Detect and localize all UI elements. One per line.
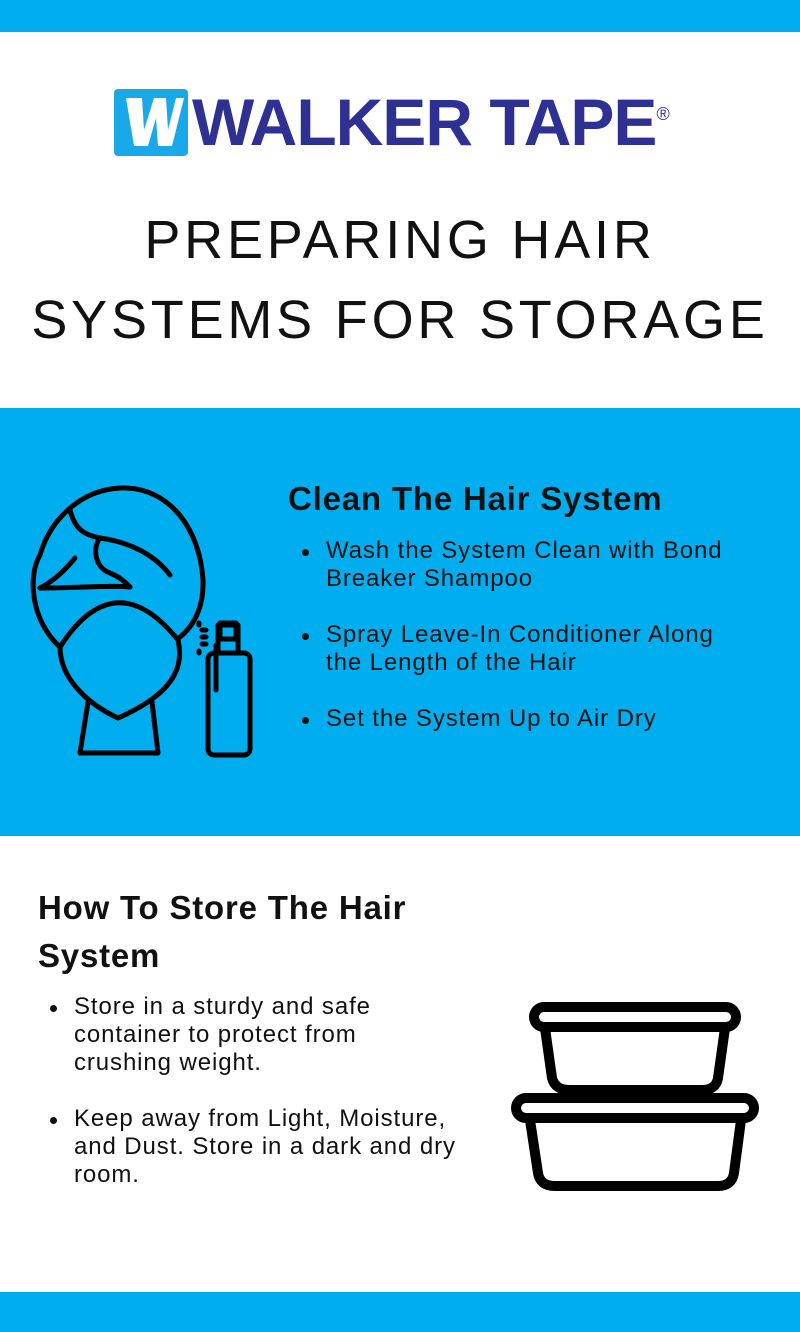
bullets: store (50, 993, 456, 1188)
bullets: store: Keep away from Light, Moisture, and Dust. Store in a dark and dry room. (74, 1105, 456, 1188)
panel: clean (0, 408, 800, 836)
title: SYSTEMS FOR STORAGE (31, 290, 769, 350)
heading: store: How To Store The Hair System (38, 889, 406, 974)
logo (114, 85, 670, 159)
title: PREPARING HAIR (144, 210, 656, 270)
bullets: store: Store in a sturdy and safe container to protect from crushing weight. (74, 993, 371, 1076)
title (31, 210, 769, 350)
top bar (0, 0, 800, 32)
bullets: clean: Spray Leave-In Conditioner Along the Length of the Hair (326, 621, 714, 676)
icon: containers (511, 1002, 759, 1191)
bullets: clean: Set the System Up to Air Dry (326, 705, 657, 732)
logo text: WALKER TAPE® (192, 85, 669, 159)
logo icon (114, 89, 188, 156)
heading: clean: Clean The Hair System (288, 480, 662, 517)
bottom bar (0, 1292, 800, 1332)
bullets: clean (302, 537, 723, 732)
icon: towel head with spray (30, 485, 252, 758)
bullets: clean: Wash the System Clean with Bond Breaker Shampoo (326, 537, 723, 592)
